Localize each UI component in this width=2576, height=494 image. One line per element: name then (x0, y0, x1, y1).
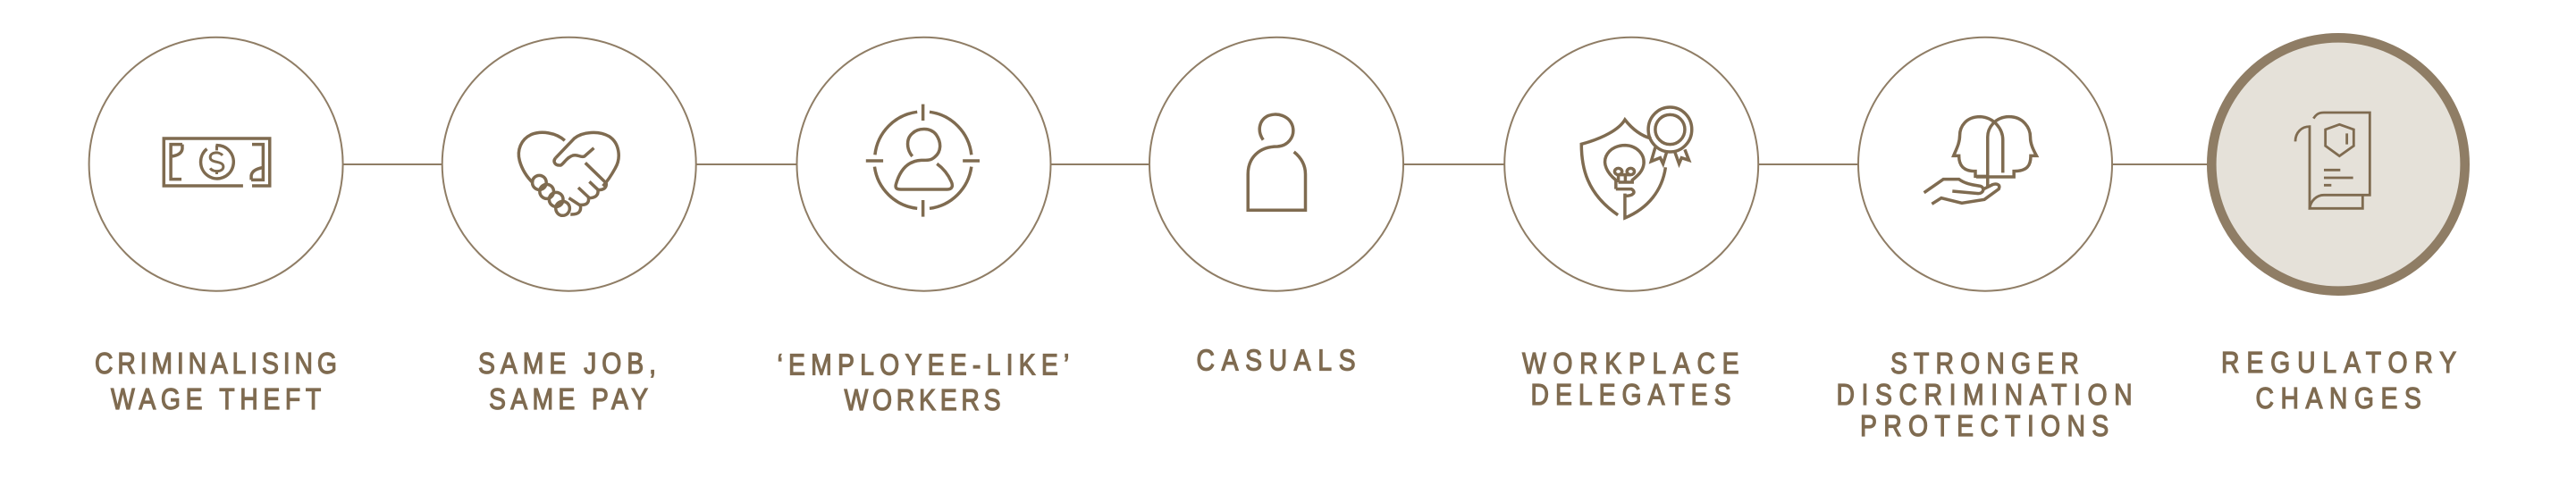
step 3: employee-like workers (778, 38, 1069, 416)
connector 6 to 7 (2112, 163, 2208, 165)
icon: person (1248, 114, 1306, 210)
circle 5 (1504, 38, 1758, 291)
step 2: same job, same pay (442, 38, 696, 415)
label 4: CASUALS (1196, 343, 1356, 377)
label 5: DELEGATES (1530, 378, 1731, 411)
step 7: regulatory changes (highlighted) (2211, 38, 2465, 415)
label 1: WAGE THEFT (111, 382, 321, 415)
label 7 (2221, 346, 2456, 415)
label 2: SAME JOB, (478, 347, 656, 380)
icon: banknote (164, 138, 270, 186)
label 5 (1522, 347, 1739, 411)
circle 1 (89, 38, 343, 291)
label 6: PROTECTIONS (1860, 409, 2109, 442)
connector 5 to 6 (1758, 163, 1858, 165)
connector 4 to 5 (1403, 163, 1504, 165)
step 6: stronger discrimination protections (1836, 38, 2133, 442)
circle 4 (1149, 38, 1403, 291)
step 4: casuals (1149, 38, 1403, 377)
icon: heart handshake (518, 132, 619, 215)
connector 1 to 2 (343, 163, 442, 165)
label 1: CRIMINALISING (95, 347, 337, 380)
icon: shield, bulb and rosette (1581, 107, 1692, 218)
step 1: criminalising wage theft (89, 38, 343, 415)
highlighted circle 7 (2211, 38, 2465, 291)
label 5: WORKPLACE (1522, 347, 1739, 380)
label 2: SAME PAY (489, 382, 648, 415)
label 1 (95, 347, 337, 415)
circle 6 (1858, 38, 2112, 291)
label 7: CHANGES (2256, 381, 2421, 415)
icon: two heads over a hand (1924, 117, 2036, 204)
circle 3 (797, 38, 1051, 291)
label 2 (478, 347, 656, 415)
step 5: workplace delegates (1504, 38, 1758, 411)
label 6: DISCRIMINATION (1836, 378, 2133, 411)
label 3: WORKERS (844, 383, 1001, 416)
label 3 (778, 347, 1069, 416)
connector 3 to 4 (1051, 163, 1149, 165)
label 6: STRONGER (1890, 347, 2079, 380)
label 6 (1836, 347, 2133, 442)
icon: person in target (866, 105, 980, 217)
circle 2 (442, 38, 696, 291)
label 7: REGULATORY (2221, 346, 2456, 380)
label 3: ‘EMPLOYEE-LIKE’ (778, 347, 1069, 381)
connector 2 to 3 (696, 163, 796, 165)
icon: rule book with shield (2295, 113, 2370, 208)
